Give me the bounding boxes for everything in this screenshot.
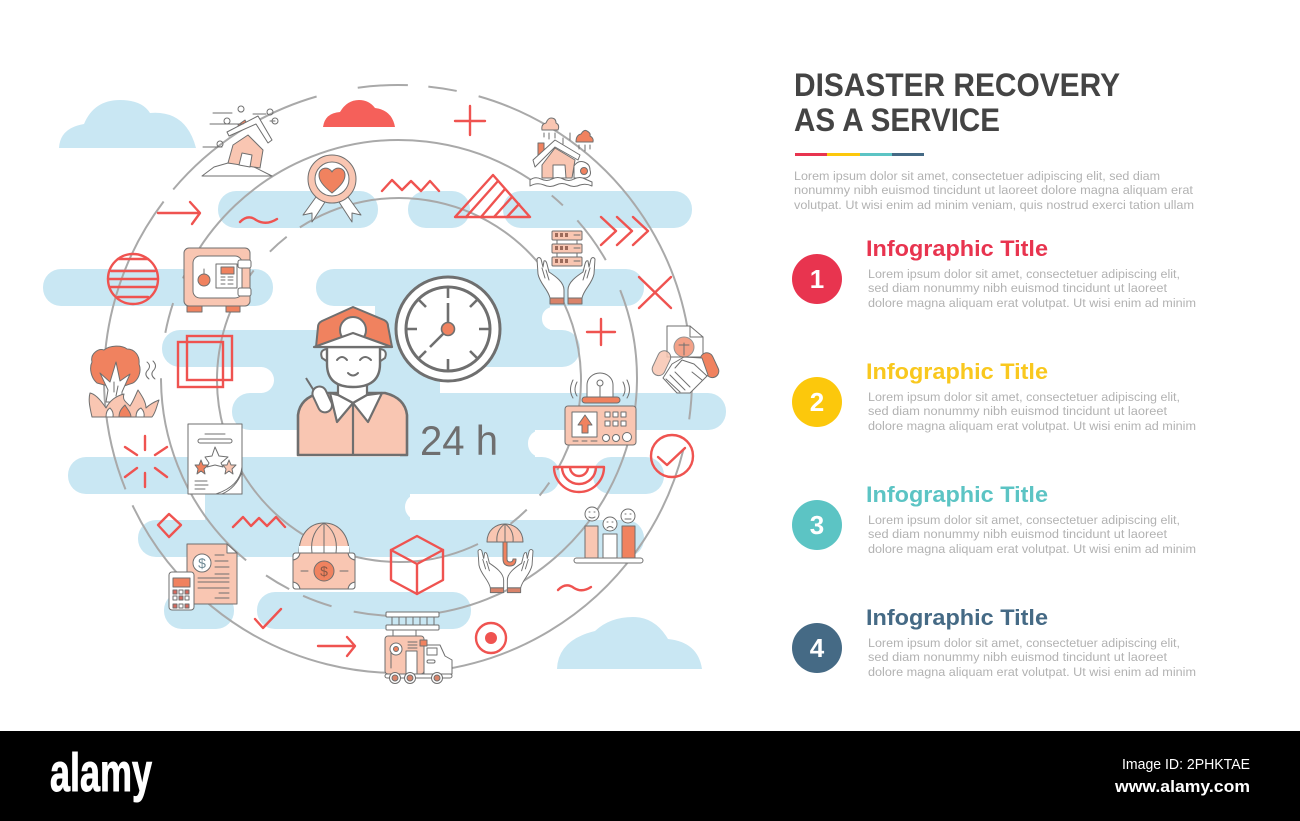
item text 2: Lorem ipsum dolor sit amet, consectetuer adipiscing elit, xyxy=(868,390,1180,404)
icon: concentric half circles xyxy=(554,467,604,492)
footer bar xyxy=(0,731,1300,821)
item text 1: Lorem ipsum dolor sit amet, consectetuer adipiscing elit, xyxy=(868,267,1180,281)
number badge 4: 4 xyxy=(810,633,825,663)
icon: red cube xyxy=(391,536,443,594)
number badge 2: 2 xyxy=(810,387,824,417)
icon: safe box xyxy=(184,248,251,312)
heading: DISASTER RECOVERY xyxy=(794,67,1120,103)
item title 3: Infographic Title xyxy=(866,482,1048,507)
footer image id: Image ID: 2PHKTAE xyxy=(1122,756,1250,773)
icon: face xyxy=(327,347,380,387)
icon: server in hands xyxy=(537,231,595,304)
icon: check mark xyxy=(255,609,281,628)
icon: radio xyxy=(306,378,334,415)
number badge 4 xyxy=(792,623,842,673)
item text 4: Lorem ipsum dolor sit amet, consectetuer adipiscing elit, xyxy=(868,636,1180,650)
icon: wave upper xyxy=(240,217,277,223)
ring: inner dashed circle xyxy=(147,128,651,632)
icon: check circle xyxy=(651,435,693,477)
icon: collar xyxy=(330,393,382,422)
item 3 xyxy=(792,482,1196,556)
ring: outer dashed circle xyxy=(42,23,754,735)
icon: zigzag lower left xyxy=(233,517,285,527)
icon: striped circle xyxy=(108,254,158,304)
icon: alarm radio xyxy=(565,373,636,445)
icon: globe and money: $ xyxy=(320,563,328,579)
item text 4: dolore magna aliquam erat volutpat. Ut wisi enim ad minim xyxy=(868,665,1196,679)
intro text: volutpat. Ut wisi enim ad minim veniam, quis nostrud exerci tation ullam xyxy=(794,198,1194,212)
ring: middle dashed circle xyxy=(90,69,708,687)
icon: red plus right xyxy=(587,319,615,345)
intro text: nonummy nibh euismod tincidunt ut laoreet dolore magna aliquam erat xyxy=(794,183,1194,197)
label: 24 h: 24 h xyxy=(420,417,498,464)
item 4 xyxy=(792,605,1196,679)
number badge 1 xyxy=(792,254,842,304)
intro text: Lorem ipsum dolor sit amet, consectetuer adipiscing elit, sed diam xyxy=(794,169,1160,183)
item text 4 xyxy=(868,636,1196,679)
icon: invoice and calculator xyxy=(169,544,237,610)
number badge 3 xyxy=(792,500,842,550)
item title 4: Infographic Title xyxy=(866,605,1048,630)
icon: burst rays xyxy=(125,436,167,487)
heading: AS A SERVICE xyxy=(794,102,1000,138)
icon: right arrow lower xyxy=(318,637,355,656)
icon: flooded house xyxy=(530,118,593,186)
background: pale blue bands xyxy=(43,191,726,629)
icon: red plus top xyxy=(455,106,485,135)
item text 2: dolore magna aliquam erat volutpat. Ut wisi enim ad minim xyxy=(868,419,1196,433)
icon: satisfaction bars xyxy=(574,507,643,563)
heading xyxy=(794,67,1120,138)
icon: umbrella in hands xyxy=(478,524,533,593)
item text 3 xyxy=(868,513,1196,556)
intro text xyxy=(794,169,1194,212)
item text 3: Lorem ipsum dolor sit amet, consectetuer adipiscing elit, xyxy=(868,513,1180,527)
footer logo: alamy xyxy=(50,743,152,803)
icon: globe and money xyxy=(293,523,355,589)
cloud: top red xyxy=(323,100,395,127)
person with cap xyxy=(298,307,407,455)
icon: heart badge xyxy=(303,155,361,222)
number badge 3: 3 xyxy=(810,510,824,540)
icon: cap opening xyxy=(340,317,366,343)
item text 3: sed diam nonummy nibh euismod tincidunt ut laoreet xyxy=(868,527,1168,541)
cloud: top left xyxy=(59,100,196,148)
icon: star rating document xyxy=(188,424,242,494)
icon: hatched triangle xyxy=(455,175,530,217)
icon: cap brim xyxy=(314,333,392,347)
icon: fire truck xyxy=(385,612,452,684)
icon: person body xyxy=(298,393,407,455)
icon: invoice and calculator: $ xyxy=(198,555,206,571)
item text 1: dolore magna aliquam erat volutpat. Ut wisi enim ad minim xyxy=(868,296,1196,310)
item text 2: sed diam nonummy nibh euismod tincidunt ut laoreet xyxy=(868,404,1168,418)
icon: wave lower xyxy=(558,585,591,590)
icon: diamond xyxy=(158,514,181,537)
item text 3: dolore magna aliquam erat volutpat. Ut wisi enim ad minim xyxy=(868,542,1196,556)
icon: right arrow upper xyxy=(158,202,200,224)
item 1 xyxy=(792,236,1196,310)
item text 1: sed diam nonummy nibh euismod tincidunt ut laoreet xyxy=(868,281,1168,295)
number badge 1: 1 xyxy=(810,264,824,294)
item title 1: Infographic Title xyxy=(866,236,1048,261)
icon: handshake with document xyxy=(650,326,721,393)
icon: target xyxy=(476,623,506,653)
footer url: www.alamy.com xyxy=(1114,777,1250,796)
icon: wind damaged house xyxy=(202,106,278,176)
icon: neck xyxy=(338,384,367,403)
icon: cap xyxy=(316,307,392,347)
icon: clock xyxy=(396,277,500,381)
item 2 xyxy=(792,359,1196,433)
number badge 2 xyxy=(792,377,842,427)
icon: shirt placket xyxy=(352,403,354,455)
icon: smile xyxy=(337,357,371,376)
icon: ears xyxy=(321,349,386,362)
icon: overlapping squares xyxy=(178,336,232,387)
icon: tree on fire xyxy=(89,346,159,417)
cloud: bottom right xyxy=(557,617,702,669)
icon: triple chevron xyxy=(601,217,648,245)
divider: four colour bar xyxy=(795,153,924,156)
item text 4: sed diam nonummy nibh euismod tincidunt ut laoreet xyxy=(868,650,1168,664)
item title 2: Infographic Title xyxy=(866,359,1048,384)
item text 1 xyxy=(868,267,1196,310)
icon: zigzag top xyxy=(382,180,439,191)
icon: red cross xyxy=(639,277,671,308)
item text 2 xyxy=(868,390,1196,433)
